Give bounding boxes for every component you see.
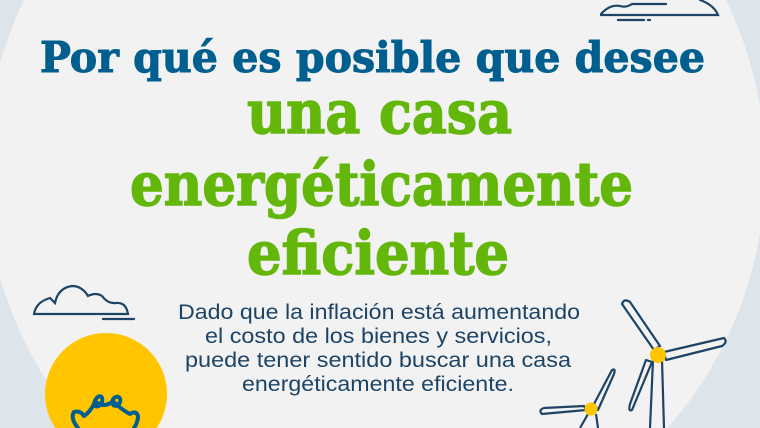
body text: el costo de los bienes y servicios, xyxy=(205,325,552,348)
turbine hubs xyxy=(584,347,666,416)
icon: light bulb xyxy=(45,333,167,428)
title green xyxy=(130,78,633,289)
icon: top cloud xyxy=(601,0,718,20)
icon: left cloud xyxy=(34,286,134,319)
body text: energéticamente eficiente. xyxy=(242,373,514,396)
body text: Dado que la inflación está aumentando xyxy=(178,301,580,324)
title green: una casa xyxy=(247,78,512,148)
icon: wind turbines xyxy=(540,300,726,428)
title green: eficiente xyxy=(247,219,509,289)
body text: puede tener sentido buscar una casa xyxy=(185,349,571,372)
title green: energéticamente xyxy=(130,150,633,220)
body text xyxy=(178,301,580,396)
title line 1: Por qué es posible que desee xyxy=(40,33,705,82)
